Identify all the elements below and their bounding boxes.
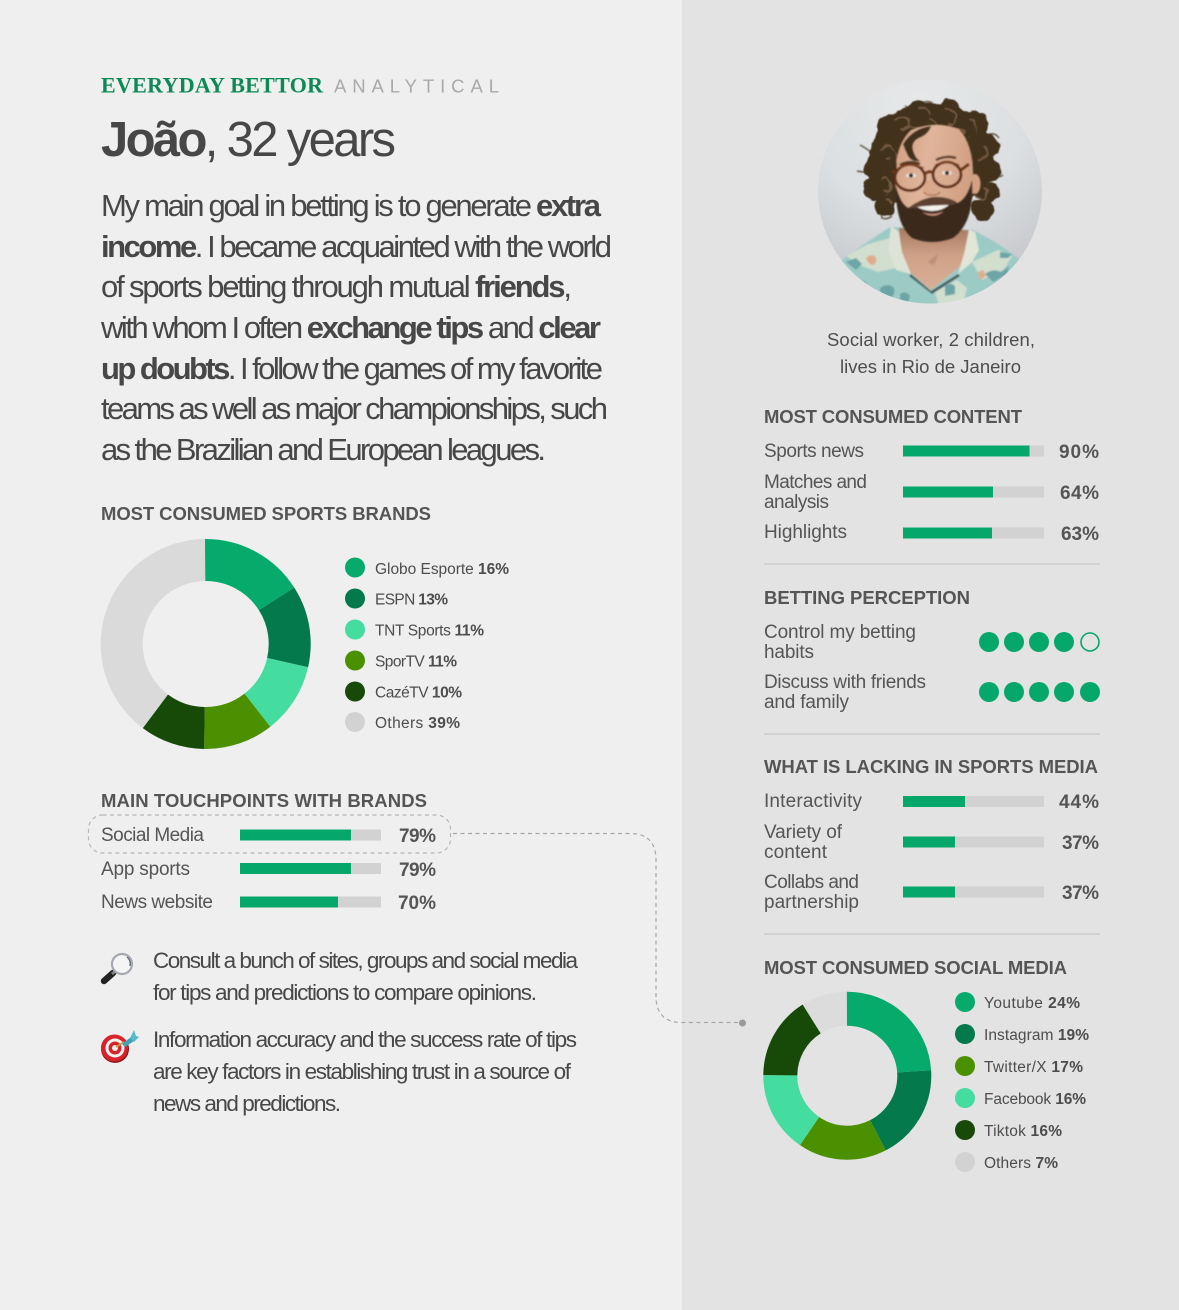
legend: social media — [955, 992, 1089, 1172]
bar chart: content — [764, 441, 1099, 545]
shirt pattern — [846, 252, 1012, 304]
legend: sports brands: Globo Esporte 16% — [375, 561, 509, 578]
text block: trust tip: Information accuracy and the success rate of tips — [153, 1027, 577, 1052]
bar chart: lacking in sports media: content — [764, 842, 828, 863]
bar chart: touchpoints: 79% — [399, 826, 436, 847]
hair mass — [863, 99, 1001, 221]
bar chart: content: Matches and — [764, 472, 867, 493]
portrait: curly-haired man with glasses — [818, 97, 1042, 304]
flyaway hairs — [857, 102, 1003, 219]
eyebrow: persona type: EVERYDAY BETTOR — [101, 72, 324, 98]
legend: sports brands: TNT Sports 11% — [375, 622, 484, 640]
bar chart: lacking in sports media: partnership — [764, 892, 859, 913]
arrow: connector from social media to social chart — [453, 834, 746, 1026]
forehead curl — [903, 126, 931, 161]
legend: sports brands: ESPN 13% — [375, 592, 448, 608]
rating: discuss with friends and family: and family — [764, 692, 850, 713]
caption: occupation and location: lives in Rio de Janeiro — [840, 356, 1021, 377]
legend: sports brands: CazéTV 10% — [375, 684, 462, 702]
bar chart: touchpoints: News website — [101, 892, 213, 913]
bar chart: content: 64% — [1060, 483, 1099, 504]
hair curl highlights — [880, 108, 988, 204]
legend: social media: Instagram 19% — [984, 1027, 1089, 1044]
bar chart: content: analysis — [764, 492, 829, 513]
text block: persona quote: of sports betting through mutual friends, — [101, 269, 572, 304]
text block: persona quote: with whom I often exchange tips and clear — [100, 310, 601, 345]
title: name and age: João, 32 years — [101, 113, 396, 167]
ear — [970, 174, 980, 194]
text block: trust tip: news and predictions. — [153, 1091, 341, 1116]
eyebrows — [900, 157, 956, 165]
heading: sports brands: MOST CONSUMED SPORTS BRANDS — [101, 503, 431, 524]
legend: social media: Tiktok 16% — [984, 1123, 1062, 1140]
collar — [888, 226, 911, 274]
eyebrow: persona type — [101, 72, 499, 98]
donut chart: social media — [780, 1009, 914, 1143]
eyebrow: persona type: ANALYTICAL — [334, 76, 499, 96]
bar chart: lacking in sports media: Collabs and — [764, 872, 859, 893]
text block: trust tip — [153, 1027, 577, 1116]
icon: dart target — [101, 1030, 139, 1063]
beard — [896, 180, 972, 242]
bar chart: touchpoints — [101, 825, 436, 914]
text block: research tip: Consult a bunch of sites, groups and social media — [153, 948, 578, 973]
bar chart: lacking in sports media: 37% — [1062, 883, 1099, 904]
rating: control my betting habits: habits — [764, 642, 814, 663]
heading: betting perception: BETTING PERCEPTION — [764, 587, 970, 608]
face — [894, 124, 974, 209]
shirt cream patches — [846, 238, 1012, 306]
shirt base — [842, 226, 1020, 304]
text block: persona quote — [100, 188, 612, 467]
bar chart: content: Highlights — [764, 522, 847, 543]
callout: social media highlight box — [88, 815, 450, 853]
legend: social media: Facebook 16% — [984, 1091, 1086, 1108]
text block: persona quote: income. I became acquainted with the world — [101, 229, 612, 264]
rating: discuss with friends and family — [764, 672, 1100, 713]
bar chart: lacking in sports media — [764, 791, 1099, 913]
text block: research tip: for tips and predictions to compare opinions. — [153, 980, 537, 1005]
bar chart: lacking in sports media: 37% — [1062, 833, 1099, 854]
rating: control my betting habits — [764, 622, 1099, 663]
rating: control my betting habits: Control my betting — [764, 622, 916, 643]
bar chart: lacking in sports media: 44% — [1059, 792, 1099, 813]
text block: persona quote: teams as well as major championships, such — [101, 391, 608, 426]
icon: magnifying glass — [104, 954, 132, 981]
text block: persona quote: My main goal in betting is to generate extra — [101, 188, 602, 223]
legend: sports brands: SporTV 11% — [375, 654, 457, 670]
bar chart: touchpoints: 79% — [399, 860, 436, 881]
mouth — [917, 205, 949, 211]
legend: social media: Twitter/X 17% — [984, 1059, 1083, 1076]
text block: research tip — [153, 948, 578, 1005]
legend: social media: Others 7% — [984, 1155, 1058, 1172]
text block: trust tip: are key factors in establishing trust in a source of — [153, 1059, 572, 1084]
glasses — [895, 162, 961, 190]
bar chart: touchpoints: App sports — [101, 859, 190, 880]
text block: persona quote: as the Brazilian and European leagues. — [101, 432, 546, 467]
caption: occupation and location: Social worker, 2 children, — [827, 329, 1035, 350]
bar chart: touchpoints: Social Media — [101, 825, 204, 846]
heading: lacking in sports media: WHAT IS LACKING IN SPORTS MEDIA — [764, 756, 1098, 777]
bar chart: content: 63% — [1061, 524, 1099, 545]
text block: persona quote: up doubts. I follow the games of my favorite — [101, 351, 603, 386]
bar chart: lacking in sports media: Variety of — [764, 822, 843, 843]
legend: social media: Youtube 24% — [984, 995, 1080, 1012]
legend: sports brands: Others 39% — [375, 715, 460, 732]
bar chart: touchpoints: 70% — [398, 893, 436, 914]
eyes — [906, 173, 916, 178]
caption: occupation and location — [827, 329, 1035, 377]
heading: social media: MOST CONSUMED SOCIAL MEDIA — [764, 957, 1067, 978]
bar chart: content: Sports news — [764, 441, 864, 462]
heading: touchpoints: MAIN TOUCHPOINTS WITH BRANDS — [101, 790, 427, 811]
neck — [899, 228, 972, 290]
bar chart: content: 90% — [1059, 442, 1099, 463]
bar chart: lacking in sports media: Interactivity — [764, 791, 862, 812]
heading: content: MOST CONSUMED CONTENT — [764, 406, 1023, 427]
legend: sports brands — [345, 558, 509, 732]
donut chart: sports brands — [122, 560, 290, 728]
rating: discuss with friends and family: Discuss with friends — [764, 672, 926, 693]
nose — [923, 180, 936, 194]
